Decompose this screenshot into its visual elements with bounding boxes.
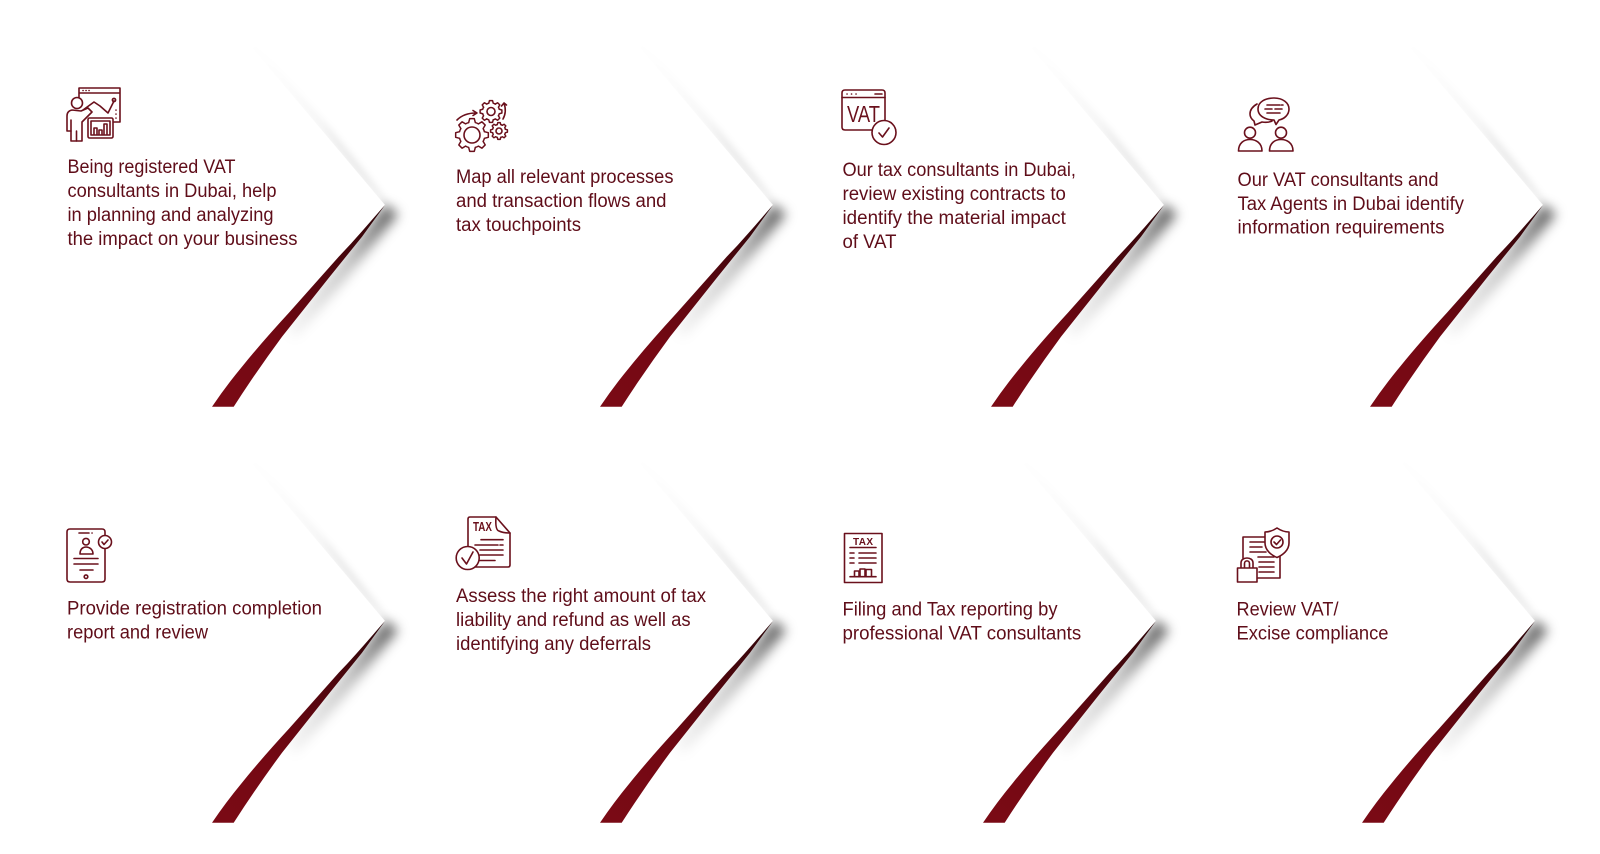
description 2: tax touchpoints	[456, 215, 581, 236]
description 3: review existing contracts to	[842, 184, 1066, 205]
description 8: Review VAT/	[1236, 600, 1339, 620]
description 4: information requirements	[1238, 218, 1444, 238]
panel: step 4 information requirements	[1238, 0, 1556, 407]
panel: step 1 planning and analysis	[67, 0, 398, 407]
chevron 2	[468, 0, 786, 407]
icon: tax document with check: TAX	[473, 519, 492, 534]
chevron 6	[468, 416, 786, 823]
description 3	[842, 160, 1076, 253]
chevron 3	[859, 0, 1177, 407]
description 6: Assess the right amount of tax	[456, 586, 706, 607]
icon: two people talking	[1238, 98, 1293, 151]
description 6: liability and refund as well as	[456, 610, 691, 631]
description 2	[456, 167, 674, 236]
description 2: and transaction flows and	[456, 191, 666, 212]
panel: step 7 filing and reporting	[842, 416, 1169, 823]
icon: VAT window with check	[842, 90, 896, 144]
icon: tax document with check	[456, 517, 510, 570]
description 8	[1236, 600, 1388, 644]
icon: gears with arrows	[456, 101, 507, 151]
description 6	[456, 586, 706, 655]
description 4	[1238, 170, 1464, 238]
icon: tax report sheet	[844, 534, 882, 582]
panel: step 6 tax liability	[456, 416, 786, 823]
description 7: Filing and Tax reporting by	[842, 600, 1058, 620]
description 1: in planning and analyzing	[68, 205, 274, 226]
description 7	[842, 600, 1081, 644]
description 2: Map all relevant processes	[456, 167, 674, 188]
chevron 5	[80, 416, 398, 823]
chevron 8	[1230, 416, 1548, 823]
description 1: the impact on your business	[68, 229, 298, 250]
icon: document with shield and lock	[1238, 528, 1289, 582]
description 3: identify the material impact	[842, 208, 1067, 229]
icon: VAT window with check: VAT	[847, 101, 880, 127]
description 7: professional VAT consultants	[842, 624, 1081, 644]
description 1: consultants in Dubai, help	[68, 181, 276, 202]
description 5: Provide registration completion	[67, 598, 322, 620]
panel: step 5 registration report	[67, 416, 398, 823]
description 6: identifying any deferrals	[456, 634, 651, 655]
description 3: Our tax consultants in Dubai,	[842, 160, 1076, 181]
description 4: Our VAT consultants and	[1238, 170, 1438, 191]
description 4: Tax Agents in Dubai identify	[1238, 194, 1464, 215]
chevron 7	[851, 416, 1169, 823]
description 5: report and review	[67, 622, 208, 644]
panel: step 3 contract review	[842, 0, 1177, 407]
description 1	[68, 157, 298, 250]
panel: step 8 compliance review	[1230, 416, 1548, 823]
description 8: Excise compliance	[1236, 624, 1388, 644]
panel: step 2 process mapping	[456, 0, 786, 407]
description 3: of VAT	[842, 232, 897, 253]
icon: presenter with chart	[67, 88, 120, 141]
description 1: Being registered VAT	[68, 157, 236, 178]
description 5	[67, 598, 322, 644]
icon: tax report sheet: TAX	[853, 537, 873, 548]
icon: tablet with profile	[67, 529, 112, 582]
chevron 4	[1238, 0, 1556, 407]
chevron 1	[80, 0, 398, 407]
